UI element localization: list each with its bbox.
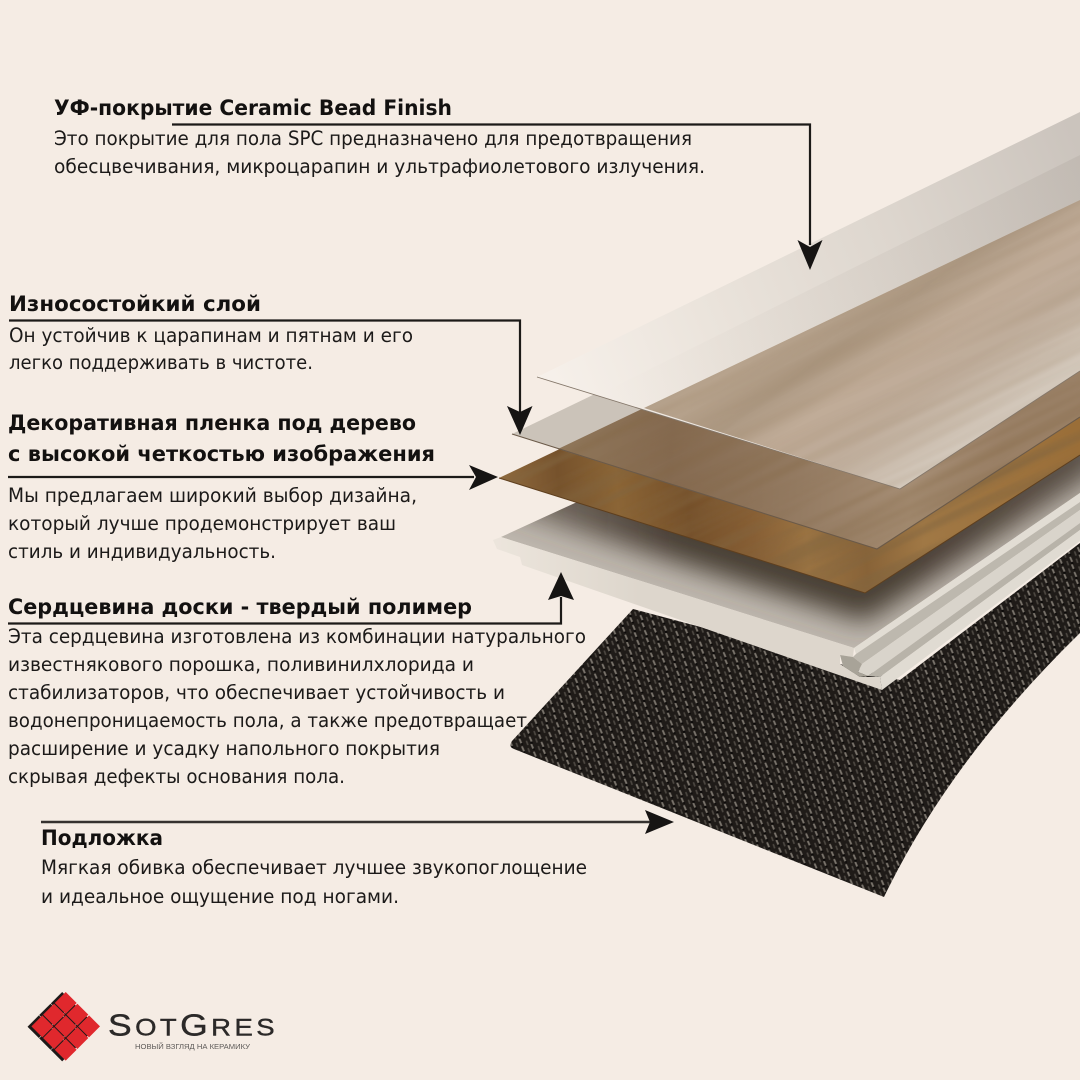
arrow: rigid core (8, 572, 574, 624)
text block: rigid core: Эта сердцевина изготовлена из комбинации натурального (8, 625, 586, 648)
layer: UV ceramic bead coating (536, 112, 1080, 490)
heading: UV coating: УФ-покрытие Ceramic Bead Finish (54, 96, 452, 121)
text block: decorative film: стиль и индивидуальность. (8, 540, 276, 563)
text block: decorative film (8, 484, 417, 563)
logo: SotGres (28, 990, 278, 1063)
heading: decorative film: с высокой четкостью изображения (8, 442, 435, 467)
text block: UV coating (54, 127, 705, 178)
text block: wear layer: Он устойчив к царапинам и пятнам и его (9, 324, 413, 347)
icon: tile diamond (28, 990, 100, 1063)
layer: decorative wood film (498, 418, 1080, 594)
text block: underlay: и идеальное ощущение под ногами. (41, 885, 399, 908)
text block: decorative film: Мы предлагаем широкий выбор дизайна, (8, 484, 417, 507)
text block: rigid core: водонепроницаемость пола, а также предотвращает (8, 709, 527, 732)
layered floor plank illustration (494, 112, 1080, 897)
layer: rigid core board (494, 456, 1080, 690)
heading: rigid core: Сердцевина доски - твердый полимер (8, 595, 472, 620)
heading: decorative film: Декоративная пленка под дерево (8, 411, 416, 436)
text block: wear layer: легко поддерживать в чистоте. (9, 351, 313, 374)
text block: rigid core: стабилизаторов, что обеспечивает устойчивость и (8, 681, 505, 704)
text block: rigid core: известнякового порошка, поливинилхлорида и (8, 653, 474, 676)
layer: underlay backing (510, 543, 1080, 897)
text block: wear layer (9, 324, 413, 374)
text block: UV coating: обесцвечивания, микроцарапин и ультрафиолетового излучения. (54, 155, 705, 178)
arrow: underlay (41, 810, 674, 834)
text block: rigid core: скрывая дефекты основания пола. (8, 765, 345, 788)
text block: UV coating: Это покрытие для пола SPC предназначено для предотвращения (54, 127, 692, 150)
text block: underlay (41, 856, 587, 908)
logo tagline: НОВЫЙ ВЗГЛЯД НА КЕРАМИКУ (135, 1042, 250, 1051)
logo wordmark: SOTGRES (108, 1008, 278, 1042)
text block: underlay: Мягкая обивка обеспечивает лучшее звукопоглощение (41, 856, 587, 879)
heading: underlay: Подложка (41, 826, 163, 851)
arrow: UV coating (172, 124, 822, 270)
text block: decorative film: который лучше продемонстрирует ваш (8, 512, 396, 535)
text block: rigid core (8, 625, 586, 788)
text block: rigid core: расширение и усадку напольного покрытия (8, 737, 440, 760)
arrow: decorative film (8, 465, 498, 490)
heading: decorative film (8, 411, 435, 467)
arrow: wear layer (9, 320, 532, 435)
layer: wear layer (512, 372, 1080, 550)
heading: wear layer: Износостойкий слой (9, 292, 261, 317)
